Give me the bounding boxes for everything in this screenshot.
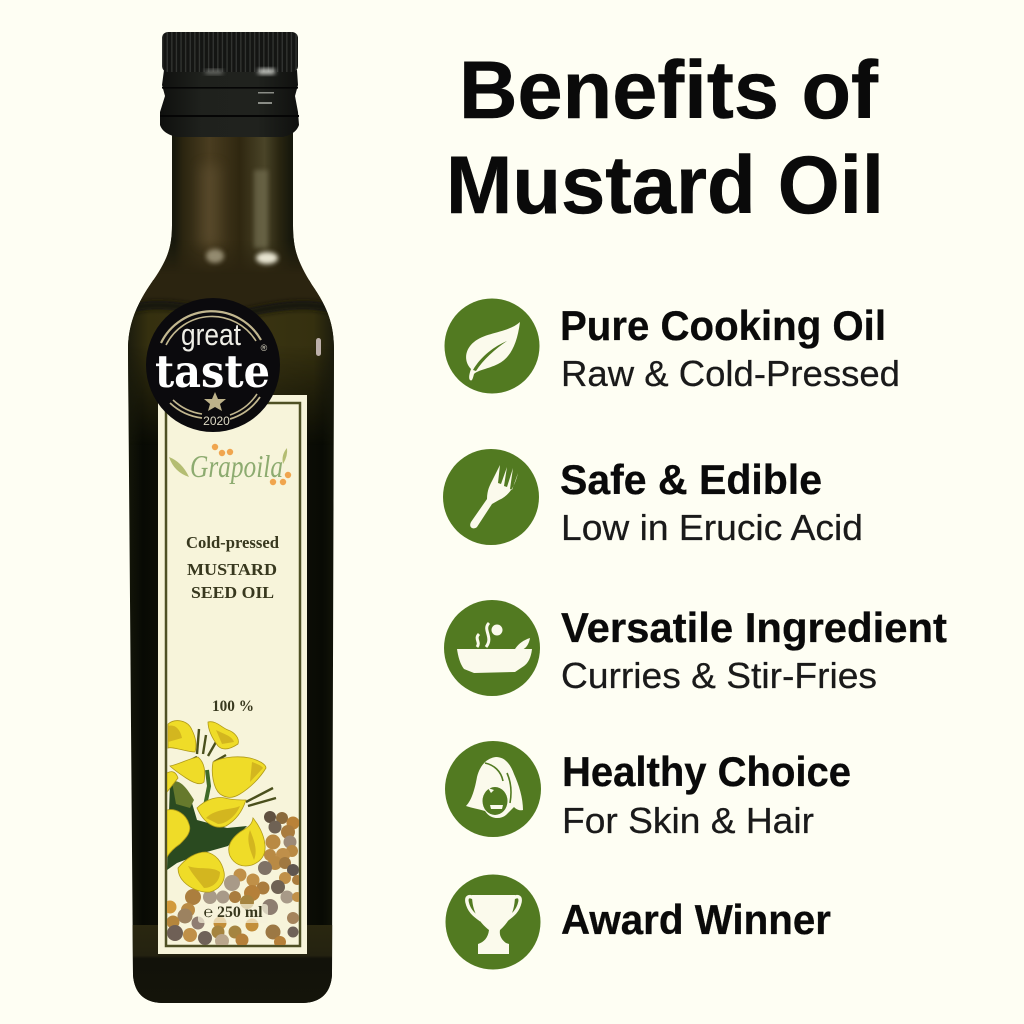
product bottle [128,32,334,1003]
icon: leaf [444,298,540,394]
bottle cap [160,32,299,137]
benefit: versatile ingredient [444,600,947,696]
benefit: healthy choice: Healthy Choice [562,748,851,795]
stems [167,783,247,870]
paper label [158,395,307,954]
title: Mustard Oil [446,140,884,231]
badge: great taste 2020 [146,298,280,432]
benefit: healthy choice: For Skin & Hair [562,800,814,841]
benefit: safe and edible [443,449,863,548]
badge: great taste 2020: ® [261,343,268,353]
bottle glass [128,132,334,1003]
icon: face with hair [445,741,541,837]
benefit: pure cooking oil: Pure Cooking Oil [560,302,886,349]
benefit: versatile ingredient: Versatile Ingredient [561,604,947,651]
product name: 100 % [212,698,254,715]
title: Benefits of [459,45,879,136]
benefit: pure cooking oil [444,298,900,394]
volume mark [198,904,268,923]
brand logo: Grapoila [169,444,291,485]
product name [186,533,279,715]
illustration: mustard flowers and seeds: ℮ 250 ml [204,904,263,921]
flowers [167,721,266,892]
product name: MUSTARD [187,560,277,579]
benefit: award winner: Award Winner [561,896,831,943]
benefit: versatile ingredient: Curries & Stir-Fries [561,655,877,696]
icon: bowl with steam [444,600,540,696]
badge: great taste 2020: 2020 [203,414,230,428]
product name: SEED OIL [191,583,274,602]
icon: fork [443,449,539,545]
seeds [164,811,302,948]
benefit: award winner [446,874,831,970]
benefit: pure cooking oil: Raw & Cold-Pressed [561,353,900,394]
title [446,45,884,231]
product name: Cold-pressed [186,533,279,552]
benefit: safe and edible: Low in Erucic Acid [561,507,863,548]
benefit: healthy choice [445,741,851,841]
icon: trophy [446,874,540,970]
badge: great taste 2020: great [181,317,241,352]
illustration: mustard flowers and seeds [164,721,302,948]
badge: great taste 2020: taste [155,345,270,398]
benefit: safe and edible: Safe & Edible [560,456,822,503]
brand logo: Grapoila: Grapoila [190,448,283,484]
